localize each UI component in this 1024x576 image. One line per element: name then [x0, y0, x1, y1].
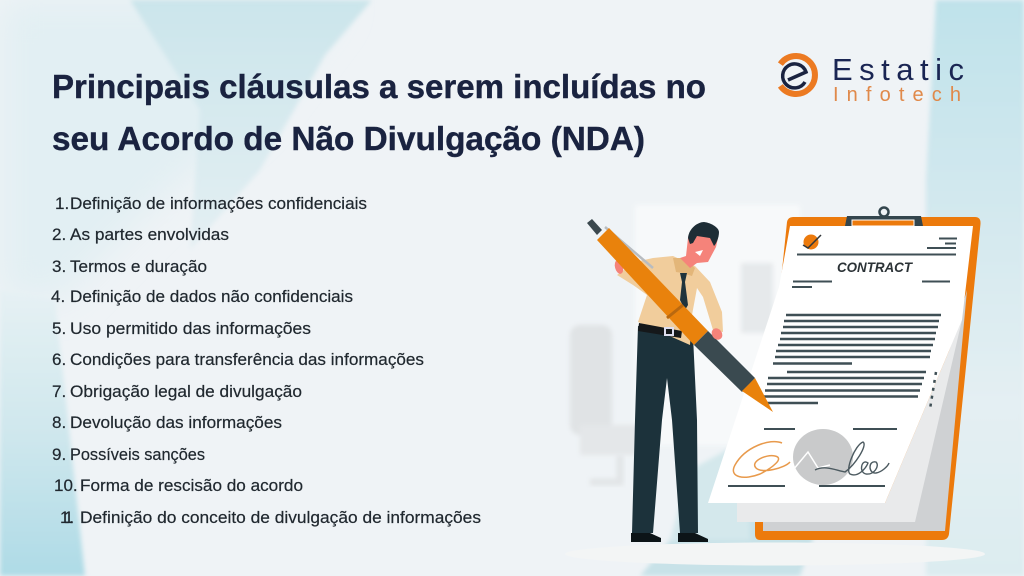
clause 4: Definição de dados não confidenciais [70, 287, 353, 306]
pen push button [587, 219, 602, 235]
pen clip [605, 227, 653, 268]
shoes [631, 533, 708, 542]
title: seu Acordo de Não Divulgação (NDA) [52, 120, 645, 157]
stamp [793, 429, 853, 485]
clause 6: Condições para transferência das informações [70, 350, 424, 369]
clause 7: Obrigação legal de divulgação [70, 382, 302, 401]
clause 3: Termos e duração [70, 257, 207, 276]
mouth [695, 250, 703, 256]
contract paper [708, 226, 973, 503]
logo: Estatic Infotech [780, 52, 964, 106]
clause 7: 7. [52, 382, 66, 401]
pen band [667, 305, 683, 318]
clause 2: As partes envolvidas [70, 225, 229, 244]
dark back sheet [763, 290, 967, 531]
collar [673, 258, 695, 276]
clipboard clip [845, 208, 923, 226]
clause 1: 1. [55, 194, 69, 213]
hand on pen [613, 259, 625, 275]
clause 6: 6. [52, 350, 66, 369]
clause 5: Uso permitido das informações [70, 319, 311, 338]
clause 8: Devolução das informações [70, 413, 282, 432]
logo icon [780, 56, 815, 94]
orange signature [733, 442, 790, 477]
clipboard [708, 208, 981, 540]
pen nib [742, 378, 773, 412]
hand on grip [709, 326, 725, 342]
clause 8: 8. [52, 413, 66, 432]
clause 1: Definição de informações confidenciais [70, 194, 367, 213]
trousers [632, 326, 698, 533]
clause 11: Definição do conceito de divulgação de informações [80, 508, 481, 527]
big pen [587, 219, 773, 412]
clause 9: 9. [52, 445, 66, 464]
clause 10: 10. [54, 476, 78, 495]
clause 9: Possíveis sanções [70, 445, 205, 464]
contract text lines [763, 315, 941, 403]
blurred office backdrop [570, 205, 800, 482]
contract heading: CONTRACT [837, 259, 913, 275]
hair [688, 222, 719, 246]
paper edge dots [930, 372, 936, 409]
white stamp swoop [793, 452, 830, 470]
man [587, 219, 773, 542]
shirt [617, 256, 723, 345]
clause 4: 4. [51, 287, 65, 306]
logo subtitle: Infotech [833, 84, 961, 106]
clause 3: 3. [52, 257, 66, 276]
list of clauses [51, 194, 481, 527]
clause 2: 2. [52, 225, 66, 244]
signature lines [728, 429, 897, 486]
pen barrel [597, 228, 708, 345]
dark signature [815, 442, 889, 475]
floor ellipse [565, 542, 985, 566]
clause 11: 11. [60, 508, 74, 527]
title [52, 68, 706, 157]
clause 10: Forma de rescisão do acordo [80, 476, 303, 495]
belt [638, 323, 682, 338]
light back sheet [737, 320, 962, 522]
clause 5: 5. [52, 319, 66, 338]
tie [680, 273, 688, 310]
neck and face [680, 230, 718, 268]
logo wordmark: Estatic [832, 52, 964, 87]
header lines [792, 238, 957, 287]
pen grip [694, 331, 755, 392]
paper seal [803, 234, 821, 250]
title: Principais cláusulas a serem incluídas no [52, 68, 706, 105]
clipboard board [755, 217, 981, 540]
